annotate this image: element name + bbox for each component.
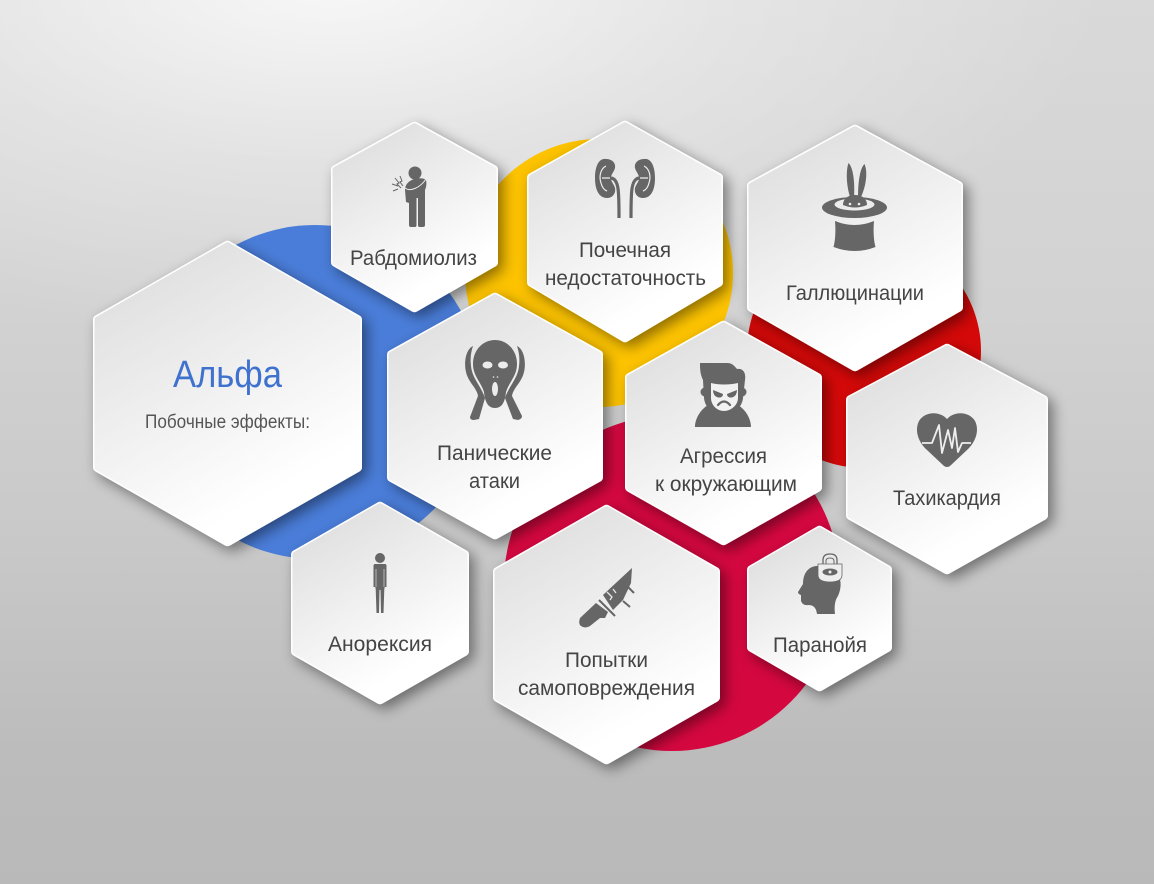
icon: rabbit in hat [822,163,887,251]
label: Паранойя [773,634,867,657]
panel: Тахикардия [851,349,1043,569]
icon: angry man [695,363,751,427]
icon: heart with pulse [917,413,977,467]
panel: Почечная недостаточность [532,126,718,337]
heading: Альфа: Альфа [173,354,283,396]
label [518,649,695,700]
icon: head with eye lock [798,554,842,614]
panel: Альфа [98,246,357,541]
panel: Анорексия [296,507,464,699]
panel: Галлюцинации [752,130,958,366]
label: к окружающим [655,473,797,496]
label [545,239,706,290]
icon: scream face [465,340,525,420]
icon: knife [579,568,634,628]
label: недостаточность [545,267,706,290]
label: Панические [437,442,552,465]
label: Галлюцинации [786,282,924,305]
panel: Панические атаки [392,298,598,534]
label: Анорексия [328,633,432,656]
circle: yellow [465,139,733,407]
icon: thin person [374,553,386,613]
label: атаки [469,470,520,493]
circle: blue [148,225,482,559]
icon: person with pain in arm [392,166,426,227]
label: Агрессия [680,445,767,468]
icon: kidneys [595,159,655,218]
panel: Попытки самоповреждения [498,510,715,759]
label: Попытки [565,649,648,672]
panel: Паранойя [752,531,887,686]
subheading: Побочные эффекты: [145,412,310,433]
circle: red [747,234,981,468]
label: Почечная [579,239,671,262]
label [655,445,797,496]
circle: crimson [504,415,840,751]
label: самоповреждения [518,677,695,700]
label: Тахикардия [893,487,1001,510]
panel: Агрессия к окружающим [630,326,817,540]
panel: Рабдомиолиз [336,127,493,307]
label [437,442,552,493]
label: Рабдомиолиз [350,247,477,270]
